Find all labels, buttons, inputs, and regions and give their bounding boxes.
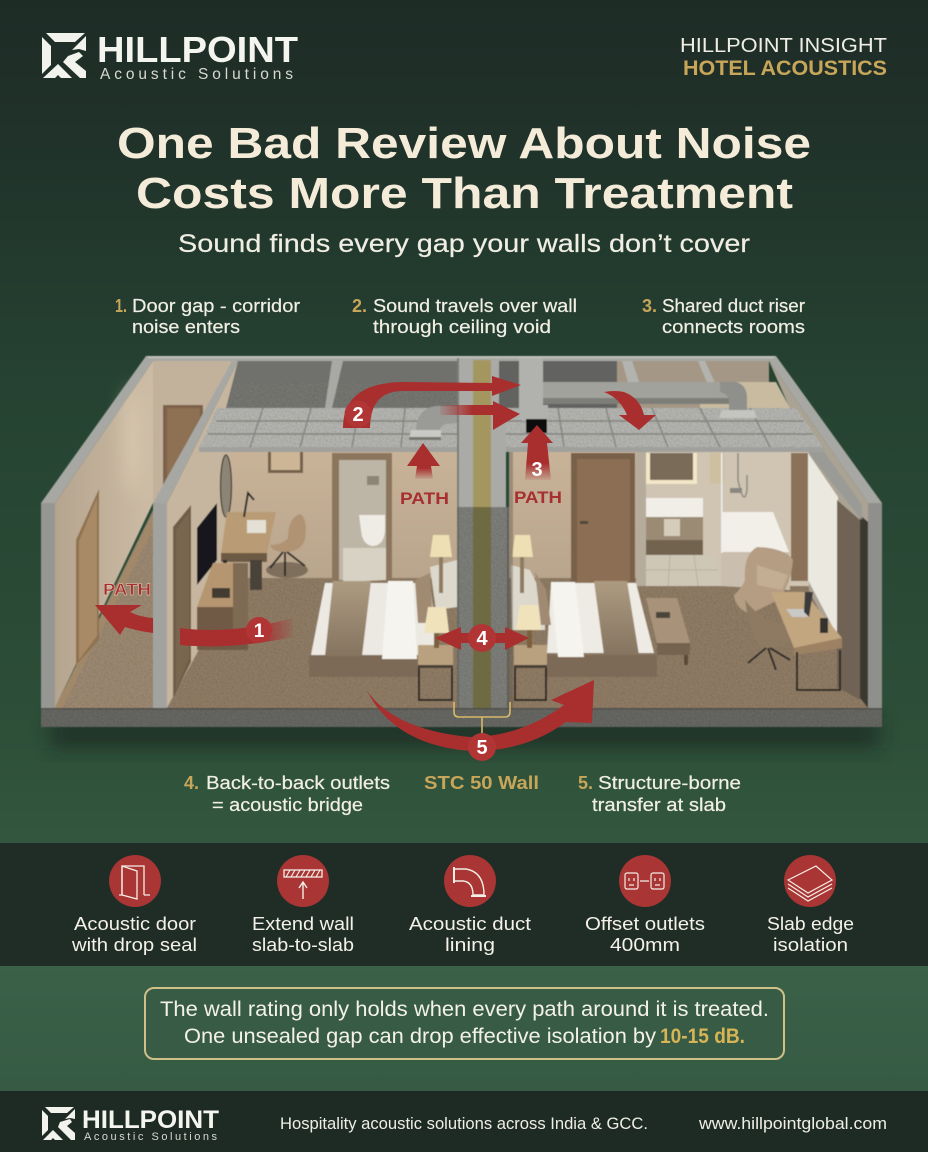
logo wordmark: HILLPOINT <box>97 29 298 70</box>
top callout labels <box>115 296 805 337</box>
label 5: transfer at slab <box>592 795 726 815</box>
partition wall end <box>153 503 167 708</box>
solution: extend wall: Extend wall <box>252 914 354 934</box>
right bed <box>511 565 657 677</box>
above ceiling void <box>226 361 790 408</box>
desk <box>221 512 276 553</box>
upper right lamp <box>512 535 533 593</box>
footer <box>0 1091 928 1152</box>
subtitle: Sound finds every gap your walls don’t cover <box>178 230 750 258</box>
arrow 2b: through void <box>440 401 520 430</box>
label 2: 2. <box>352 296 367 316</box>
footer logo: Acoustic Solutions <box>84 1131 218 1143</box>
arrow 1: door gap: 1 <box>254 621 265 642</box>
floor slab <box>41 708 882 727</box>
partition door <box>173 505 191 698</box>
right duct elbow <box>719 382 757 418</box>
callout text: The wall rating only holds when every path around it is treated. <box>160 998 769 1021</box>
arrow 3: duct riser <box>521 425 553 481</box>
footer tagline: Hospitality acoustic solutions across India & GCC. <box>280 1115 648 1133</box>
label 2: Sound travels over wall <box>373 296 577 316</box>
tv <box>197 503 217 585</box>
slab shadow <box>50 718 880 748</box>
label 3: 3. <box>642 296 657 316</box>
credenza <box>197 563 248 607</box>
title: Costs More Than Treatment <box>136 169 793 218</box>
left nightstand <box>418 645 453 665</box>
solution: extend wall <box>252 855 354 955</box>
title: One Bad Review About Noise <box>117 119 811 168</box>
arrow 5: structure-borne: 5 <box>476 737 488 759</box>
footer logo: HILLPOINT <box>82 1106 219 1134</box>
arrow 5: structure-borne <box>367 680 594 761</box>
solution: extend wall: slab-to-slab <box>252 935 354 955</box>
label 2 <box>352 296 577 337</box>
logo mark <box>42 33 86 78</box>
bathroom door <box>332 453 392 580</box>
header insight tag <box>680 35 887 80</box>
label 1: 1. <box>115 296 127 316</box>
right room <box>509 361 868 708</box>
solution: acoustic duct <box>409 855 531 955</box>
arrow 4: outlets: 4 <box>476 628 488 650</box>
stc label: STC 50 Wall <box>424 773 539 793</box>
solution: acoustic door <box>71 855 197 955</box>
arrow 2: over wall: 2 <box>352 404 364 426</box>
writing desk <box>771 592 842 690</box>
window cornice beam <box>808 452 862 520</box>
label 3: connects rooms <box>662 317 805 337</box>
bottom callout labels <box>184 773 741 815</box>
label 5: 5. <box>578 773 593 793</box>
lower left lamp <box>424 607 449 648</box>
vertical duct riser <box>519 358 548 433</box>
label 1: noise enters <box>132 317 240 337</box>
central STC wall section <box>457 358 513 708</box>
bench <box>646 598 690 665</box>
path label duct riser: PATH <box>514 488 562 507</box>
left outer wall end <box>41 503 55 708</box>
solution: offset outlets <box>585 855 705 955</box>
title <box>117 119 811 218</box>
label 3 <box>642 296 805 337</box>
callout text <box>160 998 769 1048</box>
left bed <box>309 560 457 677</box>
solution: offset outlets: 400mm <box>610 935 680 955</box>
mirror <box>220 455 232 517</box>
room door <box>571 453 635 582</box>
solution: slab edge <box>767 855 854 955</box>
solution: acoustic door: Acoustic door <box>74 914 196 934</box>
label 4 <box>184 773 390 815</box>
path label left duct: PATH <box>400 489 449 508</box>
label 1: Door gap - corridor <box>132 296 300 316</box>
callout text: One unsealed gap can drop effective isolation by <box>184 1025 657 1048</box>
framed picture <box>268 452 303 473</box>
arrow 2: over wall <box>343 376 521 428</box>
lower right lamp <box>516 605 541 648</box>
label 4: = acoustic bridge <box>212 795 363 815</box>
label 1 <box>115 296 300 337</box>
arrow 4: outlets <box>435 624 529 652</box>
horizontal duct <box>542 382 732 404</box>
armchair <box>734 547 793 614</box>
stc bracket <box>454 702 510 735</box>
logo tagline: Acoustic Solutions <box>100 66 293 83</box>
label 4: 4. <box>184 773 199 793</box>
label 5 <box>578 773 741 815</box>
ceiling tile panel <box>199 358 824 452</box>
solution: slab edge: isolation <box>773 935 848 955</box>
right nightstand <box>514 645 547 665</box>
header insight tag: HOTEL ACOUSTICS <box>683 57 887 80</box>
label 4: Back-to-back outlets <box>206 773 390 793</box>
wall tops and end faces <box>41 356 882 708</box>
label 5: Structure-borne <box>598 773 741 793</box>
curtains and window <box>791 453 808 581</box>
left duct elbow <box>409 406 457 440</box>
label 2: through ceiling void <box>373 317 551 337</box>
arrow up to left duct <box>407 443 440 479</box>
arrow: into right room <box>604 391 656 430</box>
header logo <box>42 29 298 83</box>
label 3: Shared duct riser <box>662 296 805 316</box>
upper left lamp <box>430 535 452 593</box>
solution: acoustic door: with drop seal <box>71 935 197 955</box>
arrow 3: duct riser: 3 <box>531 459 543 481</box>
callout text: 10-15 dB. <box>660 1025 745 1048</box>
footer website: www.hillpointglobal.com <box>698 1115 887 1133</box>
corridor <box>55 361 232 708</box>
chair <box>266 562 308 578</box>
building cutaway illustration <box>41 356 882 761</box>
solution: offset outlets: Offset outlets <box>585 914 705 934</box>
arrow 1: door gap <box>95 605 293 646</box>
header insight tag: HILLPOINT INSIGHT <box>680 35 887 57</box>
solution: slab edge: Slab edge <box>767 914 854 934</box>
callout band <box>0 966 928 1091</box>
left room <box>167 361 457 708</box>
desk chair <box>745 600 790 670</box>
solutions band <box>0 843 928 966</box>
path label corridor: PATH <box>103 580 151 599</box>
solution: acoustic duct: Acoustic duct <box>409 914 531 934</box>
callout box <box>145 988 784 1059</box>
bathroom <box>636 452 809 586</box>
solution: acoustic duct: lining <box>445 935 495 955</box>
right outer wall end <box>868 503 882 708</box>
footer logo <box>42 1106 219 1143</box>
